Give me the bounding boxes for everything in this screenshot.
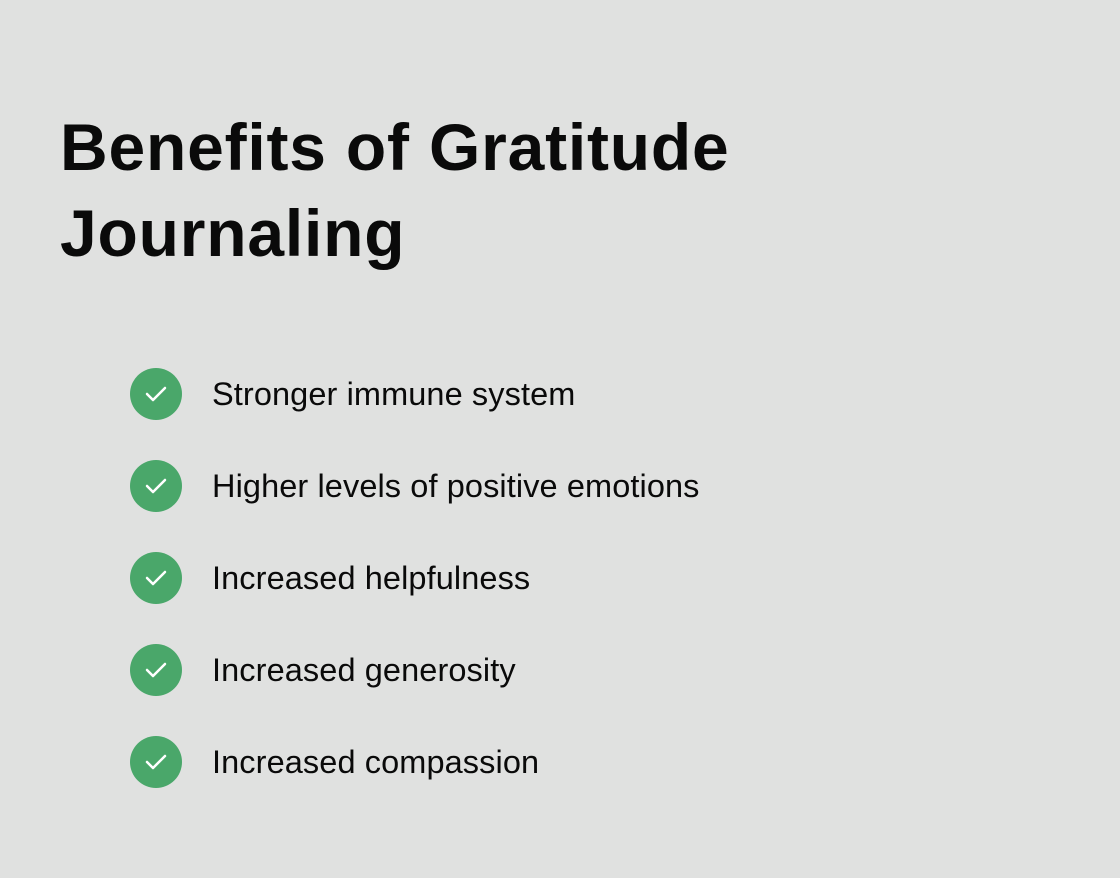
title: Journaling <box>60 196 405 270</box>
text: Stronger immune system <box>212 376 575 412</box>
icon: check <box>130 736 182 788</box>
text: Higher levels of positive emotions <box>212 468 700 504</box>
text: Increased generosity <box>212 652 516 688</box>
icon: check <box>130 368 182 420</box>
item: compassion <box>130 736 539 788</box>
icon: check <box>130 644 182 696</box>
item: positive emotions <box>130 460 700 512</box>
title: Benefits of Gratitude <box>60 110 730 184</box>
title <box>60 110 730 270</box>
benefits list <box>130 368 700 788</box>
icon: check <box>130 460 182 512</box>
item: generosity <box>130 644 516 696</box>
item: helpfulness <box>130 552 530 604</box>
icon: check <box>130 552 182 604</box>
item: stronger immune system <box>130 368 575 420</box>
text: Increased compassion <box>212 744 539 780</box>
text: Increased helpfulness <box>212 560 530 596</box>
